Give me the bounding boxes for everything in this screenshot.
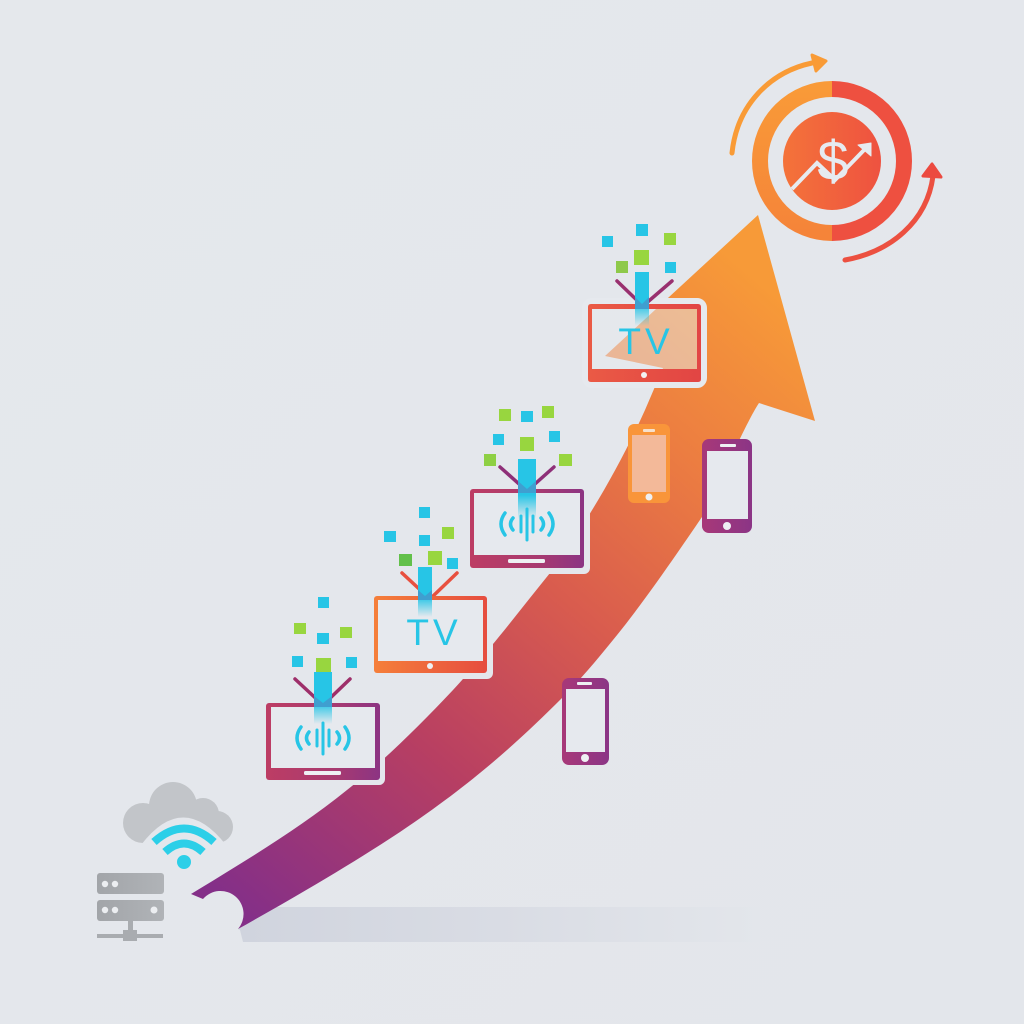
ground shadow <box>238 907 760 942</box>
sound wave <box>297 723 349 754</box>
dollar sign: $ <box>817 129 849 192</box>
data squares <box>292 597 357 672</box>
halo <box>465 484 590 574</box>
wifi symbol <box>154 828 214 865</box>
halo <box>585 301 704 385</box>
TV label: TV <box>618 321 674 362</box>
signal beam <box>314 672 332 724</box>
phone: purple lower <box>562 678 609 765</box>
ring <box>760 89 832 233</box>
beam overlap <box>418 590 432 600</box>
red cycle arrow <box>845 164 941 260</box>
core circle <box>783 112 881 210</box>
screen frame <box>588 304 701 382</box>
growth line <box>792 143 871 189</box>
signal beam <box>635 272 649 326</box>
TV station 2 <box>369 507 493 679</box>
cloud <box>123 782 233 843</box>
phone: purple right <box>702 439 752 533</box>
TV station 1 <box>261 597 385 785</box>
sound wave <box>501 509 553 540</box>
antenna <box>500 467 554 491</box>
beam overlap <box>314 696 332 707</box>
phone: orange <box>628 424 670 503</box>
antenna <box>402 573 457 599</box>
orange cycle arrow <box>732 55 826 153</box>
signal beam <box>518 459 536 519</box>
beam overlap <box>635 297 649 309</box>
growth arrow <box>191 215 815 929</box>
halo <box>369 591 493 679</box>
icon: server stack <box>97 873 164 941</box>
screen frame <box>470 489 584 568</box>
antenna <box>295 679 350 705</box>
screen frame <box>266 703 380 780</box>
beam overlap <box>518 481 536 493</box>
data squares <box>484 406 572 466</box>
TV station 4 <box>585 224 704 385</box>
screen frame <box>374 596 487 673</box>
data squares <box>384 507 458 569</box>
TV label: TV <box>406 612 462 653</box>
TV station 3 <box>465 406 590 574</box>
signal beam <box>418 567 432 617</box>
data squares <box>602 224 676 273</box>
icon: wifi cloud <box>123 782 233 880</box>
wifi cutout <box>141 818 226 880</box>
halo <box>261 698 385 785</box>
revenue target icon <box>760 89 904 233</box>
antenna <box>617 281 672 306</box>
